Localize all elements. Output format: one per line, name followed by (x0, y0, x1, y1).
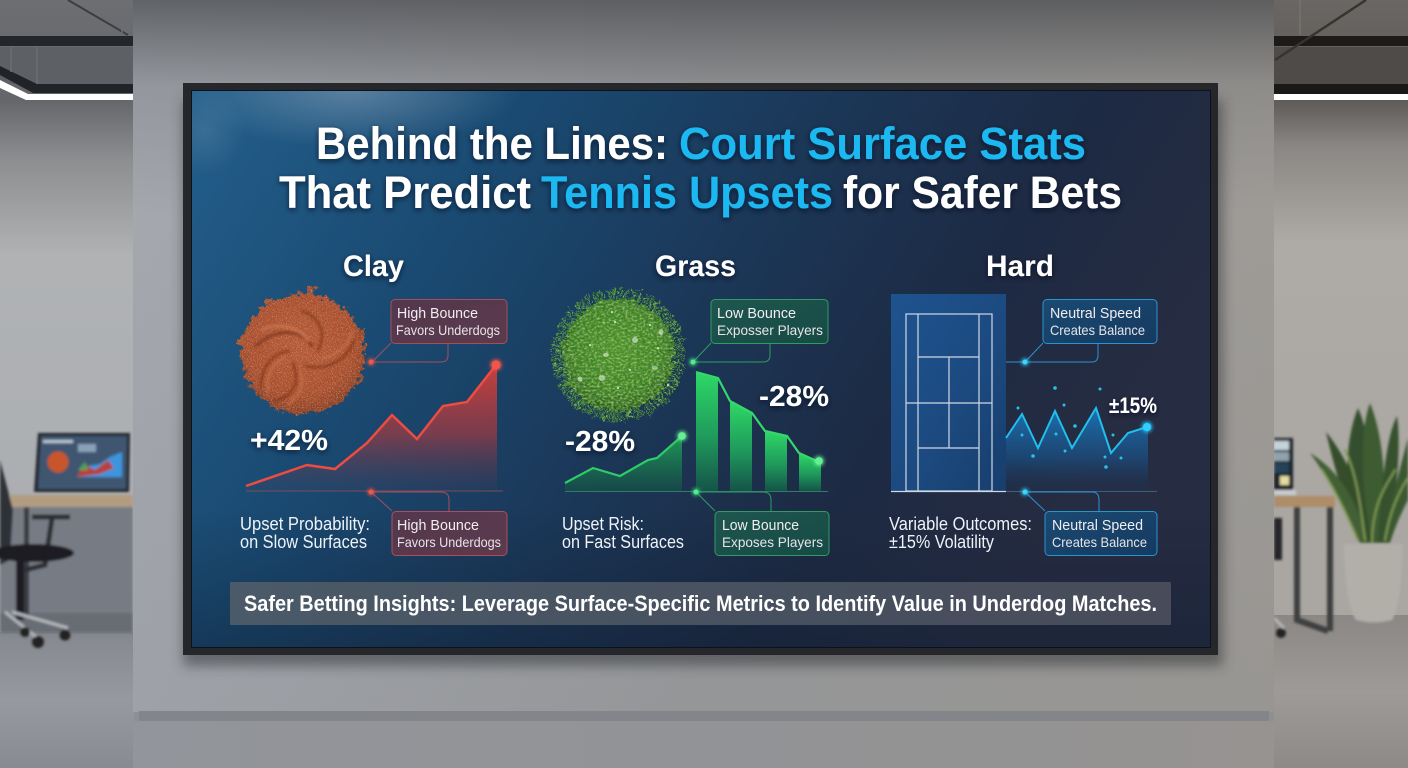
grass caption (562, 514, 684, 552)
title: Behind the Lines: (316, 118, 668, 169)
clay caption: on Slow Surfaces (240, 532, 367, 552)
title: for Safer Bets (843, 167, 1122, 218)
title: That Predict (279, 167, 531, 218)
stat: -28% left: -28% (565, 426, 635, 458)
callout: hard bottom (1022, 490, 1157, 556)
laptop on left desk (34, 433, 130, 492)
callout: grass top: Low Bounce (717, 305, 796, 322)
panel: hard (889, 250, 1157, 556)
grass heading: Grass (655, 250, 736, 283)
callout: grass bottom (694, 490, 829, 556)
chart: clay upset probability (246, 360, 503, 491)
callout: grass bottom: Exposes Players (722, 534, 823, 550)
callout: clay bottom: High Bounce (397, 517, 479, 534)
clay caption (240, 514, 370, 552)
hard caption: ±15% Volatility (889, 532, 994, 552)
hard caption (889, 514, 1032, 552)
right desk, tablet and plant (1274, 403, 1408, 638)
right ceiling beams and light (1274, 0, 1408, 100)
title: Tennis Upsets (541, 167, 833, 218)
screen shadow (183, 100, 1223, 666)
stat: +42%: +42% (250, 425, 328, 457)
callout: clay top: Favors Underdogs (396, 322, 500, 338)
title: Court Surface Stats (679, 118, 1086, 169)
left ceiling beams and light (0, 0, 133, 100)
icon: hard court diagram (891, 294, 1006, 491)
stat: ±15%: ±15% (1109, 393, 1157, 418)
left office room (0, 0, 134, 768)
stat: -28% right: -28% (759, 381, 829, 413)
chart: hard volatility (891, 386, 1157, 492)
panel: grass (556, 250, 829, 556)
callout: clay top: High Bounce (397, 305, 478, 322)
right floor (1274, 615, 1408, 768)
screen background (191, 90, 1211, 648)
callout: clay top (368, 300, 507, 364)
grass caption: on Fast Surfaces (562, 532, 684, 552)
clay caption: Upset Probability: (240, 514, 370, 534)
grass caption: Upset Risk: (562, 514, 644, 534)
callout: clay bottom: Favors Underdogs (397, 534, 501, 550)
callout: grass bottom: Low Bounce (722, 517, 799, 534)
right office room (1274, 0, 1408, 768)
insight banner: Safer Betting Insights: Leverage Surface-Specific Metrics to Identify Value in Underdog Matches. (244, 591, 1157, 616)
plant (1310, 403, 1408, 543)
wall skirting and floor (139, 711, 1269, 721)
left desk, laptop and chair (0, 433, 133, 648)
hard heading: Hard (986, 250, 1054, 283)
left floor (0, 632, 134, 768)
icon: grass tuft (556, 293, 680, 417)
panel: clay (238, 250, 507, 556)
callout: hard bottom: Neutral Speed (1052, 517, 1143, 534)
chart: grass falling bars (565, 372, 828, 492)
callout: hard top: Neutral Speed (1050, 305, 1141, 322)
monitor frame (183, 83, 1218, 655)
insight banner (230, 582, 1171, 625)
icon: clay swirl mound (238, 287, 367, 414)
callout: hard top: Creates Balance (1050, 322, 1145, 338)
callout: hard top (1006, 300, 1157, 364)
callout: hard bottom: Creates Balance (1052, 534, 1147, 550)
title (279, 118, 1122, 218)
chart: grass left line (565, 432, 686, 491)
hard caption: Variable Outcomes: (889, 514, 1032, 534)
callout: clay bottom (368, 490, 507, 556)
clay heading: Clay (343, 250, 404, 283)
callout: grass top: Exposser Players (717, 322, 823, 338)
callout: grass top (690, 300, 828, 364)
